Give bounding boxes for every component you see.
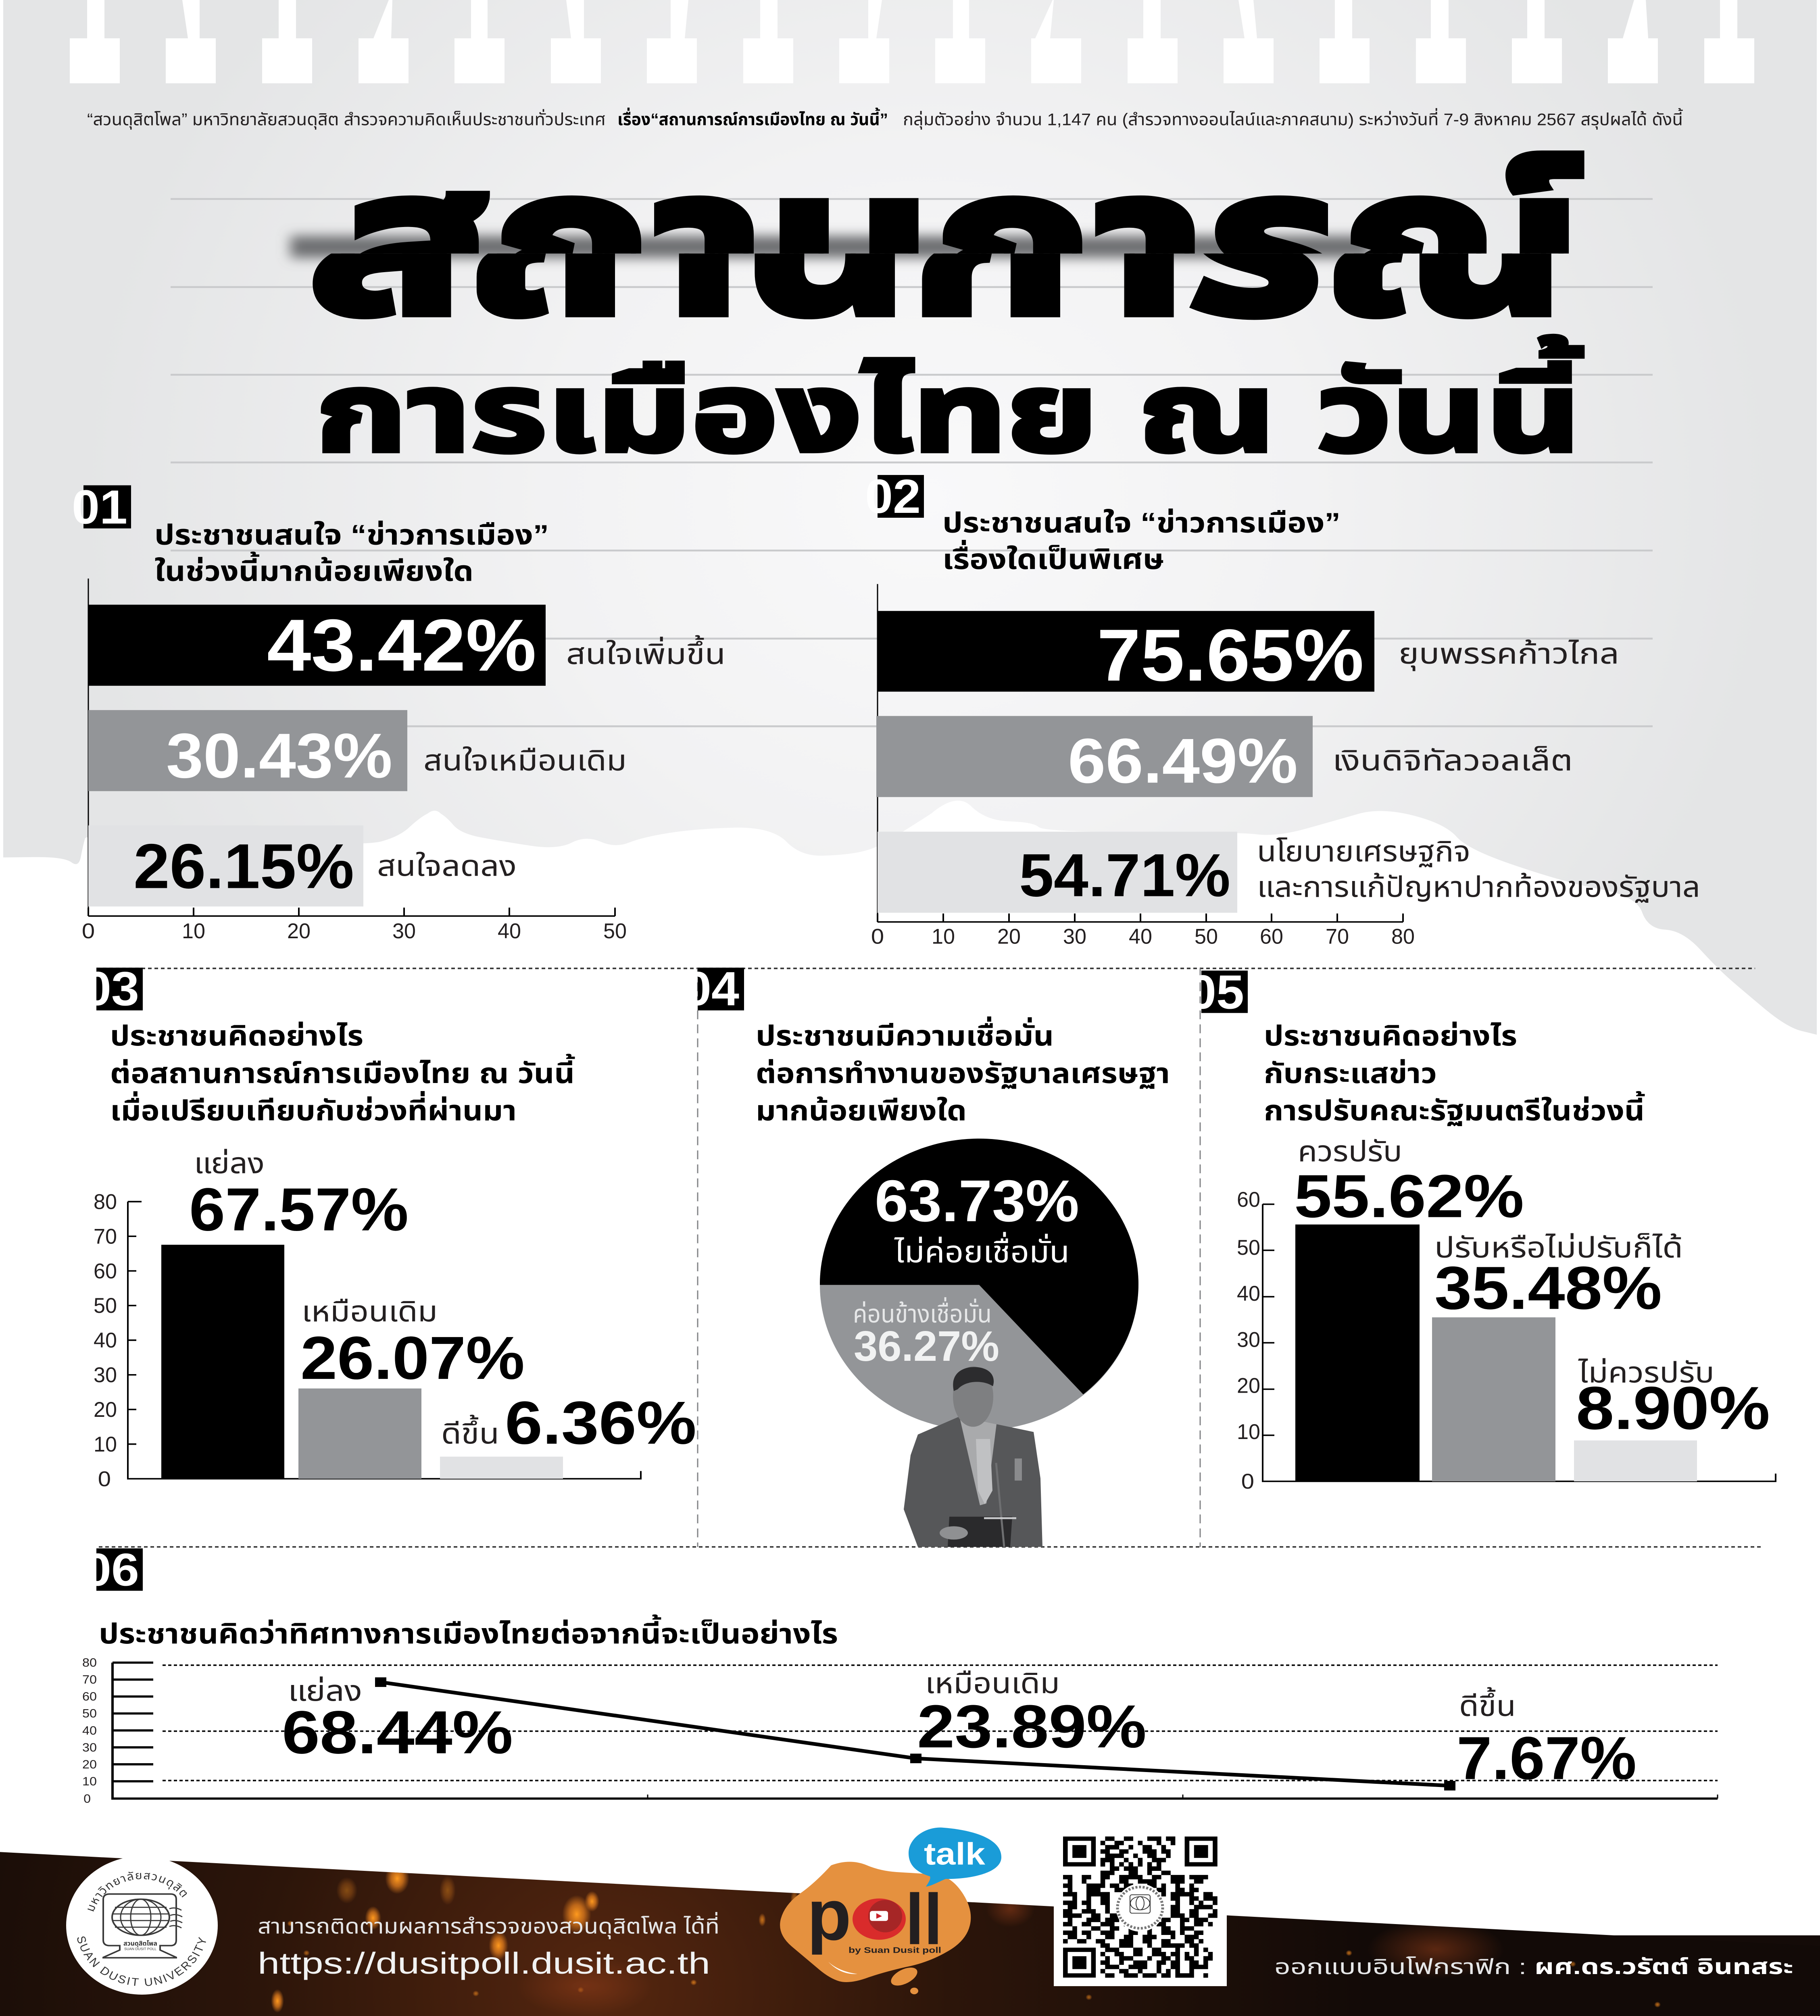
badge 02: 02: [865, 470, 921, 523]
heading 05: ประชาชนคิดอย่างไร: [1264, 1020, 1517, 1052]
bar chart 02: [871, 584, 1700, 948]
designer credit: ออกแบบอินโฟกราฟิก :: [1274, 1955, 1526, 1979]
bar chart 03: เหมือนเดิม: [302, 1295, 438, 1328]
bar chart 03: แย่ลง: [194, 1147, 265, 1179]
bar chart 01: สนใจลดลง: [377, 850, 517, 882]
line chart: 10: [82, 1775, 97, 1788]
bar chart 03: 40: [94, 1328, 117, 1352]
heading 05: การปรับคณะรัฐมนตรีในช่วงนี้: [1264, 1091, 1645, 1127]
bar chart 01: 0: [82, 919, 95, 943]
bar chart 03: 50: [94, 1294, 117, 1318]
bar chart 01: 30.43%: [166, 720, 392, 791]
bar chart 05: 35.48%: [1434, 1254, 1662, 1322]
bar chart 05: [1237, 1135, 1776, 1493]
bar chart 03: 67.57%: [189, 1176, 409, 1243]
footer follow text: https://dusitpoll.dusit.ac.th: [258, 1946, 710, 1980]
designer credit: ผศ.ดร.วรัตต์ อินทสระ: [1534, 1955, 1793, 1979]
bar chart 01: 30: [392, 919, 416, 943]
intro text: กลุ่มตัวอย่าง จำนวน 1,147 คน (สำรวจทางออนไลน์และภาคสนาม) ระหว่างวันที่ 7-9 สิงหาคม 2567 สรุปผลได้ ดังนี้: [903, 108, 1683, 130]
torn paper background: [3, 0, 1817, 1035]
heading 06: ประชาชนคิดว่าทิศทางการเมืองไทยต่อจากนี้จะเป็นอย่างไร: [99, 1614, 838, 1649]
intro text: เรื่อง“สถานการณ์การเมืองไทย ณ วันนี้”: [617, 108, 888, 129]
footer follow text: [258, 1912, 719, 1980]
heading 02: ประชาชนสนใจ “ข่าวการเมือง”: [942, 508, 1341, 539]
bar chart 05: 50: [1237, 1235, 1260, 1259]
panel 03: compared to the past: [83, 962, 696, 1491]
heading 01: ประชาชนสนใจ “ข่าวการเมือง”: [154, 520, 549, 551]
pie chart: ค่อนข้างเชื่อมั่น: [853, 1297, 992, 1328]
bar chart 02: 66.49%: [1068, 725, 1298, 796]
notebook ruled lines: [171, 199, 1653, 726]
bar chart 02: 60: [1260, 925, 1283, 948]
title: main headline with sliced blur band: [281, 150, 1584, 320]
logo: poll talk: ll: [905, 1879, 942, 1960]
bar chart 02: เงินดิจิทัลวอลเล็ต: [1332, 744, 1573, 777]
line chart: 50: [82, 1707, 97, 1720]
bar chart 01: สนใจเหมือนเดิม: [423, 744, 627, 777]
bar chart 03: 20: [94, 1397, 117, 1421]
panel 06: direction of Thai politics: [82, 1544, 1718, 1806]
title: main headline with sliced blur band: สถานการณ์: [308, 130, 1567, 356]
line chart: ดีขึ้น: [1459, 1687, 1516, 1722]
badge 06: 06: [83, 1544, 139, 1595]
pie chart: 63.73%: [875, 1168, 1079, 1234]
line chart: เหมือนเดิม: [925, 1667, 1060, 1699]
bar chart 03: 6.36%: [505, 1389, 696, 1457]
bar chart 02: 80: [1391, 925, 1415, 948]
bar chart 01: 10: [182, 919, 205, 943]
title: main headline with sliced blur band: สถานการณ์: [337, 130, 1584, 356]
bar chart 05: 10: [1237, 1420, 1260, 1443]
badge 05: 05: [1188, 966, 1244, 1019]
bar chart 02: 40: [1129, 925, 1152, 948]
heading 04: ต่อการทำงานของรัฐบาลเศรษฐา: [756, 1058, 1170, 1089]
panel 01: interest in political news: [72, 481, 725, 943]
bar chart 03: 80: [94, 1190, 117, 1214]
bar chart 01: 43.42%: [267, 604, 536, 686]
line chart: 68.44%: [282, 1699, 513, 1766]
logo: Suan Dusit University: SUAN DUSIT UNIVERSITY: [74, 1935, 210, 1989]
heading 05: กับกระแสข่าว: [1264, 1058, 1437, 1089]
bar chart 02: นโยบายเศรษฐกิจ: [1257, 835, 1470, 868]
bar chart 02: 10: [932, 925, 955, 948]
bar chart 02: 50: [1195, 925, 1218, 948]
bar chart 05: 40: [1237, 1281, 1260, 1306]
bar chart 01: 26.15%: [133, 831, 354, 902]
bar chart 01: 40: [498, 919, 521, 943]
heading 03: ประชาชนคิดอย่างไร: [110, 1020, 363, 1052]
bar chart 05: ปรับหรือไม่ปรับก็ได้: [1434, 1231, 1683, 1264]
footer dark band with sparks: [0, 1852, 1820, 2016]
logo: Suan Dusit University: สวนดุสิตโพล: [123, 1940, 157, 1947]
bar chart 03: 70: [94, 1225, 117, 1248]
intro text: [87, 108, 1683, 130]
bar chart 03: [94, 1147, 696, 1491]
bar chart 02: 70: [1326, 925, 1349, 948]
bar chart 03: 10: [94, 1432, 117, 1456]
bar chart 05: 30: [1237, 1328, 1260, 1352]
heading 04: ประชาชนมีความเชื่อมั่น: [756, 1016, 1054, 1052]
line chart: 40: [82, 1724, 97, 1737]
bar chart 03: 60: [94, 1259, 117, 1283]
bar chart 05: ไม่ควรปรับ: [1578, 1356, 1714, 1389]
bar chart 05: 55.62%: [1294, 1162, 1524, 1230]
heading 02: [942, 508, 1341, 575]
bar chart 01: 20: [287, 919, 311, 943]
line chart: แย่ลง: [288, 1675, 362, 1707]
heading 03: [110, 1020, 575, 1127]
line chart: 70: [82, 1673, 97, 1686]
bar chart 02: และการแก้ปัญหาปากท้องของรัฐบาล: [1257, 871, 1700, 903]
panel 05: cabinet reshuffle: [1188, 966, 1776, 1493]
heading 01: [154, 520, 549, 587]
icon: prime minister at lectern: [904, 1366, 1042, 1547]
heading 03: เมื่อเปรียบเทียบกับช่วงที่ผ่านมา: [110, 1091, 517, 1127]
QR code: [1054, 1828, 1227, 1986]
bar chart 02: 54.71%: [1019, 841, 1230, 909]
line chart: 80: [82, 1656, 97, 1669]
pie chart: [820, 1139, 1138, 1431]
pie chart: 36.27%: [854, 1322, 999, 1370]
heading 04: มากน้อยเพียงใด: [756, 1095, 967, 1127]
bar chart 03: 26.07%: [300, 1324, 525, 1392]
badge 01: 01: [72, 481, 127, 534]
bar chart 01: [82, 579, 725, 943]
intro text: “สวนดุสิตโพล” มหาวิทยาลัยสวนดุสิต สำรวจความคิดเห็นประชาชนทั่วประเทศ: [87, 109, 606, 130]
spiral binding tabs: [70, 0, 1754, 83]
panel 04: confidence in government: [684, 962, 1170, 1547]
bar chart 03: 30: [94, 1363, 117, 1387]
bar chart 02: ยุบพรรคก้าวไกล: [1399, 637, 1619, 671]
designer credit: [1274, 1955, 1793, 1979]
panel 02: topics of special interest: [865, 470, 1700, 948]
logo: Suan Dusit University: [66, 1856, 218, 1995]
logo: Suan Dusit University: SUAN DUSIT POLL: [124, 1947, 156, 1951]
bar chart 02: 75.65%: [1097, 614, 1364, 696]
line chart: 30: [82, 1741, 97, 1754]
heading 05: [1264, 1020, 1645, 1127]
bar chart 02: 30: [1063, 925, 1086, 948]
heading 01: ในช่วงนี้มากน้อยเพียงใด: [154, 552, 473, 587]
logo: poll talk: by Suan Dusit poll: [848, 1946, 941, 1955]
bar chart 03: ดีขึ้น: [441, 1414, 499, 1450]
badge 03: 03: [83, 962, 139, 1016]
bar chart 01: สนใจเพิ่มขึ้น: [566, 635, 725, 670]
bar chart 05: 60: [1237, 1187, 1260, 1212]
pie chart: ไม่ค่อยเชื่อมั่น: [894, 1232, 1069, 1269]
bar chart 02: 0: [871, 925, 884, 948]
heading 04: [756, 1016, 1170, 1127]
line chart: 60: [82, 1690, 97, 1703]
badge 04: 04: [684, 962, 739, 1016]
line chart: 0: [83, 1792, 91, 1806]
title: second line: การเมืองไทย ณ วันนี้: [316, 335, 1583, 475]
logo: poll talk: p: [807, 1875, 851, 1955]
line chart: 7.67%: [1457, 1724, 1637, 1792]
footer follow text: สามารถติดตามผลการสำรวจของสวนดุสิตโพล ได้ที่: [258, 1912, 719, 1939]
bar chart 03: 0: [98, 1467, 111, 1491]
bar chart 05: 0: [1241, 1469, 1254, 1493]
bar chart 01: 50: [603, 919, 627, 943]
bar chart 02: 20: [997, 925, 1021, 948]
logo: poll talk: talk: [924, 1837, 985, 1872]
line chart: [82, 1656, 1718, 1806]
bar chart 05: ควรปรับ: [1298, 1135, 1402, 1168]
line chart: 20: [82, 1758, 97, 1771]
logo: poll talk: [783, 1827, 1001, 1994]
heading 03: ต่อสถานการณ์การเมืองไทย ณ วันนี้: [110, 1054, 575, 1089]
bar chart 05: 8.90%: [1576, 1375, 1770, 1442]
heading 02: เรื่องใดเป็นพิเศษ: [942, 540, 1164, 575]
bar chart 05: 20: [1237, 1374, 1260, 1397]
logo: Suan Dusit University: มหาวิทยาลัยสวนดุสิต: [83, 1869, 192, 1913]
line chart: 23.89%: [917, 1693, 1147, 1760]
